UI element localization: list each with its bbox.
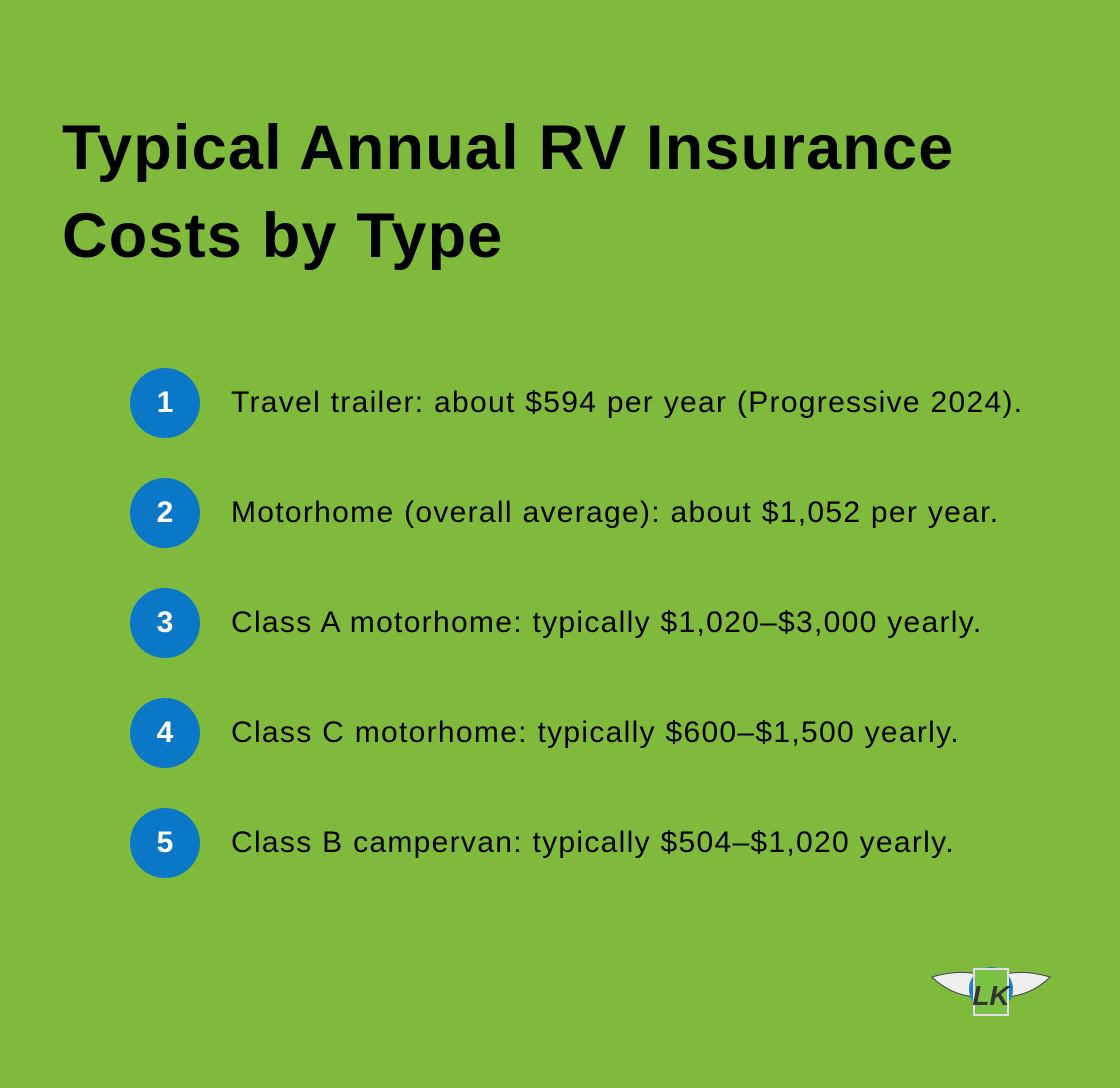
- title: Costs by Type: [62, 201, 504, 271]
- item 2: [130, 478, 999, 548]
- item 1: [130, 368, 1023, 438]
- item 1: 1: [157, 386, 173, 419]
- item 3: [130, 588, 982, 658]
- item 4: Class C motorhome: typically $600–$1,500 yearly.: [231, 716, 960, 749]
- item 5: 5: [157, 826, 173, 859]
- title: Typical Annual RV Insurance: [62, 113, 954, 183]
- item 5: Class B campervan: typically $504–$1,020 yearly.: [231, 826, 955, 859]
- item 2: 2: [157, 496, 173, 529]
- icon: logo: LK: [972, 980, 1011, 1011]
- item 4: [130, 698, 960, 768]
- item 5: [130, 808, 955, 878]
- item 3: 3: [157, 606, 173, 639]
- item 1: Travel trailer: about $594 per year (Progressive 2024).: [231, 386, 1023, 419]
- title: [62, 113, 954, 271]
- item 4: 4: [157, 716, 173, 749]
- item 3: Class A motorhome: typically $1,020–$3,000 yearly.: [231, 606, 982, 639]
- item 2: Motorhome (overall average): about $1,052 per year.: [231, 496, 999, 529]
- icon: logo: [931, 967, 1051, 1016]
